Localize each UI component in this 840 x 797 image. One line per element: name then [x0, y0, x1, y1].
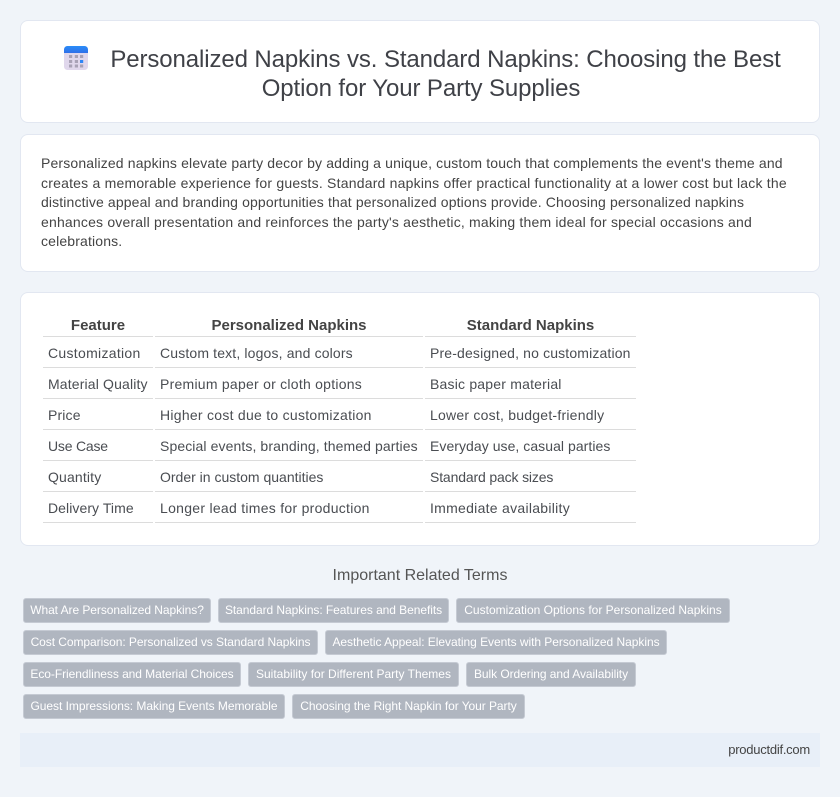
- text block: introduction: enhances overall presentation and reinforces the party's aesthetic, making them ideal for special occasions and: [41, 214, 752, 230]
- comparison table: [43, 317, 636, 523]
- text block: introduction: creates a memorable experience for guests. Standard napkins offer practical functionality at a lower cost but lack the: [41, 175, 787, 191]
- comparison table: Customization: [48, 345, 141, 361]
- comparison table: Custom text, logos, and colors: [160, 345, 353, 361]
- related term tags: Standard Napkins: Features and Benefits: [225, 603, 442, 617]
- heading: important related terms: Important Related Terms: [333, 567, 507, 584]
- comparison table: Premium paper or cloth options: [160, 376, 362, 392]
- comparison table: Pre-designed, no customization: [430, 345, 631, 361]
- panel: introduction: [20, 134, 820, 272]
- panel: title card: [20, 20, 820, 123]
- text block: introduction: distinctive appeal and branding opportunities that personalized options provide. Choosing personalized napkins: [41, 194, 744, 210]
- comparison table: Standard pack sizes: [430, 469, 553, 485]
- related term tags: Cost Comparison: Personalized vs Standard Napkins: [31, 635, 310, 649]
- text block: introduction: celebrations.: [41, 233, 122, 249]
- related term tags: Aesthetic Appeal: Elevating Events with Personalized Napkins: [332, 635, 660, 649]
- comparison table: Basic paper material: [430, 376, 562, 392]
- comparison table: Immediate availability: [430, 500, 570, 516]
- comparison table: Lower cost, budget-friendly: [430, 407, 604, 423]
- title: [110, 46, 781, 102]
- comparison table: Use Case: [48, 438, 108, 454]
- related term tags: Bulk Ordering and Availability: [474, 667, 628, 681]
- related term tags: Guest Impressions: Making Events Memorable: [30, 699, 278, 713]
- related term tags: Eco-Friendliness and Material Choices: [30, 667, 234, 681]
- comparison table: Feature: [71, 317, 125, 334]
- panel: comparison table: [20, 292, 820, 546]
- comparison table: Special events, branding, themed parties: [160, 438, 418, 454]
- footer bar: [20, 733, 820, 767]
- text block: introduction: [41, 155, 787, 249]
- related term tags: Suitability for Different Party Themes: [256, 667, 451, 681]
- icon: calendar: [64, 46, 88, 70]
- text block: introduction: Personalized napkins elevate party decor by adding a unique, custom touch that complements the event's theme and: [41, 155, 783, 171]
- comparison table: Material Quality: [48, 376, 148, 392]
- comparison table: Price: [48, 407, 81, 423]
- comparison table: Longer lead times for production: [160, 500, 370, 516]
- comparison table: Everyday use, casual parties: [430, 438, 610, 454]
- comparison table: Quantity: [48, 469, 101, 485]
- comparison table: Higher cost due to customization: [160, 407, 372, 423]
- related term tags: Choosing the Right Napkin for Your Party: [300, 699, 517, 713]
- title: Personalized Napkins vs. Standard Napkins: Choosing the Best: [110, 46, 781, 73]
- comparison table: Standard Napkins: [467, 317, 594, 334]
- comparison table: Order in custom quantities: [160, 469, 323, 485]
- related term tags: [23, 598, 730, 719]
- related term tags: What Are Personalized Napkins?: [30, 603, 204, 617]
- comparison table: Delivery Time: [48, 500, 134, 516]
- comparison table: Personalized Napkins: [211, 317, 367, 334]
- related term tags: Customization Options for Personalized Napkins: [464, 603, 722, 617]
- footer source: productdif.com: [728, 742, 810, 757]
- title: Option for Your Party Supplies: [262, 75, 580, 102]
